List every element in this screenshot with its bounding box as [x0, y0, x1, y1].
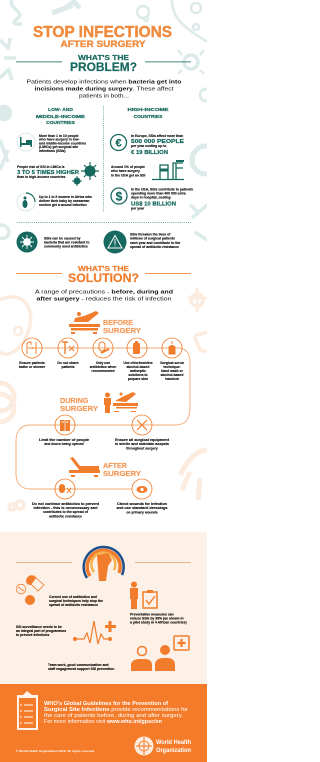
stat text: 3 to 5 times higher: 3 TO 5 TIMES HIGHER	[17, 170, 79, 176]
stat: bed icon	[17, 133, 35, 151]
before surgery heading: SURGERY	[103, 326, 141, 335]
step: limit doors	[39, 415, 89, 446]
WHO logo: Organization	[156, 748, 191, 754]
stat text: USA: Around 1% of people	[111, 165, 145, 169]
text: surveillance	[16, 625, 66, 637]
step: bathe or shower	[19, 338, 46, 369]
column heading: low- and middle-income: MIDDLE-INCOME	[36, 114, 86, 120]
WHO logo: World Health	[156, 740, 191, 746]
stat: woman icon	[17, 193, 35, 211]
step: hand scrub: Surgical scrub	[160, 361, 184, 365]
after surgery heading	[103, 461, 141, 478]
text: teamwork: staff engagement support SSI prevention	[48, 667, 114, 671]
before surgery heading: BEFORE	[103, 318, 133, 327]
stat text: Europe	[131, 134, 184, 156]
step: hand scrub: alcohol-based	[161, 373, 183, 377]
during surgery heading: DURING	[60, 396, 89, 405]
stat text: LMIC prevalence	[38, 134, 86, 153]
footer text: the care of patients before, during and after surgery.	[44, 713, 183, 719]
stat text: Europe: 500 000 PEOPLE	[131, 139, 184, 145]
text: preventive measures: Preventative measures can	[130, 612, 174, 616]
icon: virus	[72, 162, 99, 186]
footer text	[44, 701, 188, 725]
threat text: SSIs threaten the lives of	[130, 232, 171, 236]
before surgery heading	[103, 318, 141, 335]
intro text: incisions made during surgery . These affect	[34, 86, 174, 92]
stat text: 3 to 5 times higher: than in high-income countries	[17, 175, 66, 179]
icon: before surgery bed	[69, 311, 100, 334]
column heading: low- and middle-income: LOW- AND	[48, 107, 73, 113]
step: limit doors: Limit the number of people	[39, 438, 89, 442]
stat text: 3 to 5 times higher	[17, 165, 79, 179]
threat text: millions of surgical patients	[130, 236, 175, 240]
step: chlorhexidine: alcohol-based	[127, 365, 149, 369]
icon: team	[131, 636, 189, 671]
step: hand scrub: technique:	[163, 365, 181, 369]
connecting path	[16, 348, 190, 489]
text: antibiotics use: spread of antibiotic resistance	[49, 603, 98, 607]
intro text: patients in both...	[79, 94, 129, 100]
column heading: low- and middle-income: COUNTRIES	[46, 120, 76, 126]
solution intro	[35, 290, 173, 302]
after surgery heading: AFTER	[103, 461, 128, 470]
resistance text: bacteria that are resistant to	[44, 240, 89, 244]
icon: heartbeat and plus	[73, 621, 116, 644]
resistance text: commonly used antibiotics	[44, 244, 88, 248]
panel: orange footer	[0, 684, 207, 762]
step: do not continue antibiotics: Do not continue antibiotics to prevent	[32, 502, 100, 506]
threat text: each year and contribute to the	[130, 241, 180, 245]
stat text: Africa: section get a wound infection	[39, 203, 87, 207]
stat: dollar icon	[111, 188, 127, 204]
stat text: LMIC prevalence: and middle-income countries	[39, 141, 86, 145]
step: check wounds: on primary wounds	[126, 510, 158, 514]
title: STOP INFECTIONS	[33, 24, 172, 41]
text: teamwork	[48, 663, 114, 671]
stat text: 3 to 5 times higher: People risk of SSI in LMICs is	[17, 165, 65, 169]
icon: person and clipboard	[130, 582, 157, 609]
heading: what's the solution	[16, 264, 191, 285]
step: hand scrub: hand wash or	[161, 369, 184, 373]
text: teamwork: Team work, good communication and	[48, 663, 109, 667]
step: sterile equipment: is sterile and maintain asepsis	[115, 442, 169, 446]
column heading: high-income: HIGH-INCOME	[128, 107, 169, 113]
step: check wounds: Check wounds for infection	[117, 502, 167, 506]
during surgery heading	[60, 396, 98, 413]
step: bathe or shower: Ensure patients	[19, 361, 45, 365]
step: do not shave: Do not shave	[57, 361, 79, 365]
threat text: spread of antibiotic resistance	[130, 245, 179, 249]
stat text: Africa: deliver their baby by caesarean	[39, 199, 90, 203]
after surgery heading: SURGERY	[103, 469, 141, 478]
footer text: For more information visit www.who.int/gpsc/en	[44, 719, 162, 725]
during surgery heading: SURGERY	[60, 404, 98, 413]
heading: what's the problem	[16, 53, 191, 74]
stat: euro icon: €	[115, 138, 122, 150]
footer text: WHO's Global Guidelines for the Prevention of	[44, 701, 168, 707]
stat text: Europe: € 19 BILLION	[131, 150, 168, 156]
dotted dividers	[17, 106, 191, 222]
heading: what's the problem: PROBLEM?	[70, 60, 137, 74]
text: antibiotics use: surgical techniques help stop the	[49, 599, 103, 603]
stat: euro icon	[110, 134, 126, 150]
solution intro: after surgery - reduces the risk of infection	[36, 296, 172, 302]
stat text: Africa	[39, 195, 92, 207]
step: do not continue antibiotics: antibiotic resistance	[49, 514, 82, 518]
icon: warning circle	[104, 230, 126, 254]
solution intro: A range of precautions - before, during and	[35, 290, 173, 296]
stat text: USA	[110, 165, 145, 178]
step: do not continue antibiotics: contributes to the spread of	[43, 510, 89, 514]
step: chlorhexidine: antiseptic	[130, 369, 146, 373]
stat text: USA cost: per year	[131, 206, 145, 210]
text: surveillance: to prevent infections	[16, 633, 49, 637]
resistance text: SSIs can be caused by	[44, 236, 81, 240]
threat text	[130, 232, 180, 249]
stat text: Africa: Up to 1 in 5 women in Africa who	[39, 195, 92, 199]
stat text: USA cost: US$ 10 BILLION	[131, 202, 176, 208]
intro text	[26, 80, 182, 100]
teal bacteria decoration	[0, 0, 220, 240]
campaign logo	[16, 547, 191, 581]
step: do not continue antibiotics: infection - this is unnecessary and	[34, 506, 98, 510]
stat text: Europe: In Europe, SSIs affect more than	[131, 134, 183, 138]
WHO logo	[134, 736, 191, 756]
step: bathe or shower: bathe or shower	[19, 365, 46, 369]
step: hand scrub: handrub	[165, 377, 179, 381]
icon: clipboard	[17, 691, 38, 730]
step: do not shave	[57, 338, 79, 369]
heading: what's the solution: SOLUTION?	[68, 271, 139, 285]
icon: bacteria circle	[16, 232, 38, 252]
title	[33, 24, 172, 49]
step: sterile equipment: Ensure all surgical equipment	[115, 438, 170, 442]
text: preventive measures: reduce SSIs by 39% (as shown in	[130, 616, 184, 620]
icon: surgeon and patient	[104, 392, 138, 413]
text: surveillance: SSI surveillance needs to be	[16, 625, 62, 629]
step: chlorhexidine: Use chlorhexidine	[123, 361, 153, 365]
stat text: LMIC prevalence: (LMICs) get surgical site	[39, 145, 78, 149]
resistance text	[44, 236, 89, 248]
stat text: USA cost: days in hospital, costing	[131, 196, 171, 200]
step: limit doors: and doors being opened	[44, 442, 84, 446]
footer text: Surgical Site Infections provide recommendations for	[44, 707, 188, 713]
stat text: USA cost	[131, 188, 193, 210]
column heading: high-income	[128, 107, 169, 120]
stat text: USA cost: spending more than 400 000 extra	[131, 192, 186, 196]
stat text: LMIC prevalence: who have surgery in low-	[38, 138, 80, 142]
step: check wounds: and use standard dressings	[116, 506, 168, 510]
text: antibiotics use	[49, 595, 103, 607]
stat text: LMIC prevalence: infections (SSIs)	[39, 149, 66, 153]
heading: what's the solution: WHAT'S THE	[78, 264, 129, 273]
column heading: high-income: COUNTRIES	[134, 114, 163, 120]
text: antibiotics use: Correct use of antibiotics and	[49, 595, 97, 599]
panel: peach background	[0, 532, 207, 684]
step: do not shave: patients	[62, 365, 75, 369]
step: chlorhexidine: prepare skin	[128, 377, 148, 381]
copyright: © World Health Organization 2016. All rights reserved.	[16, 749, 95, 753]
stat text: Europe: per year costing up to	[131, 144, 166, 148]
step: sterile equipment	[115, 415, 170, 450]
column heading: low- and middle-income	[36, 107, 86, 126]
step: antibiotics: Only use	[96, 361, 110, 365]
step: check wounds	[116, 479, 168, 514]
title: AFTER SURGERY	[60, 38, 146, 49]
text: preventive measures	[130, 612, 187, 624]
background	[0, 0, 207, 762]
step: sterile equipment: throughout surgery	[126, 446, 158, 450]
stat text: USA: in the USA get an SSI	[111, 174, 145, 178]
step: antibiotics: recommended	[91, 369, 115, 373]
step: hand scrub	[160, 338, 184, 381]
text: surveillance: an integral part of programmes	[16, 629, 66, 633]
step: chlorhexidine	[123, 338, 153, 381]
step: antibiotics	[90, 338, 116, 373]
icon: pills	[16, 575, 44, 605]
heading: what's the problem: WHAT'S THE	[78, 53, 129, 62]
text: preventive measures: a pilot study in 4 African countries)	[130, 620, 187, 624]
icon: recovery bed	[69, 457, 100, 477]
step: chlorhexidine: solutions to	[128, 373, 148, 377]
stat text: USA: who have surgery	[110, 169, 140, 173]
orange bacteria decoration	[0, 288, 207, 510]
stat text: USA cost: In the USA, SSIs contribute to patients	[131, 188, 193, 192]
stat: dollar icon: $	[116, 190, 123, 204]
step: do not continue antibiotics	[32, 479, 100, 518]
icon: hospital	[152, 161, 184, 180]
intro text: Patients develop infections when bacteria get into	[26, 80, 182, 86]
step: antibiotics: antibiotics when	[90, 365, 116, 369]
stat text: LMIC prevalence: More than 1 in 10 people	[39, 134, 79, 138]
